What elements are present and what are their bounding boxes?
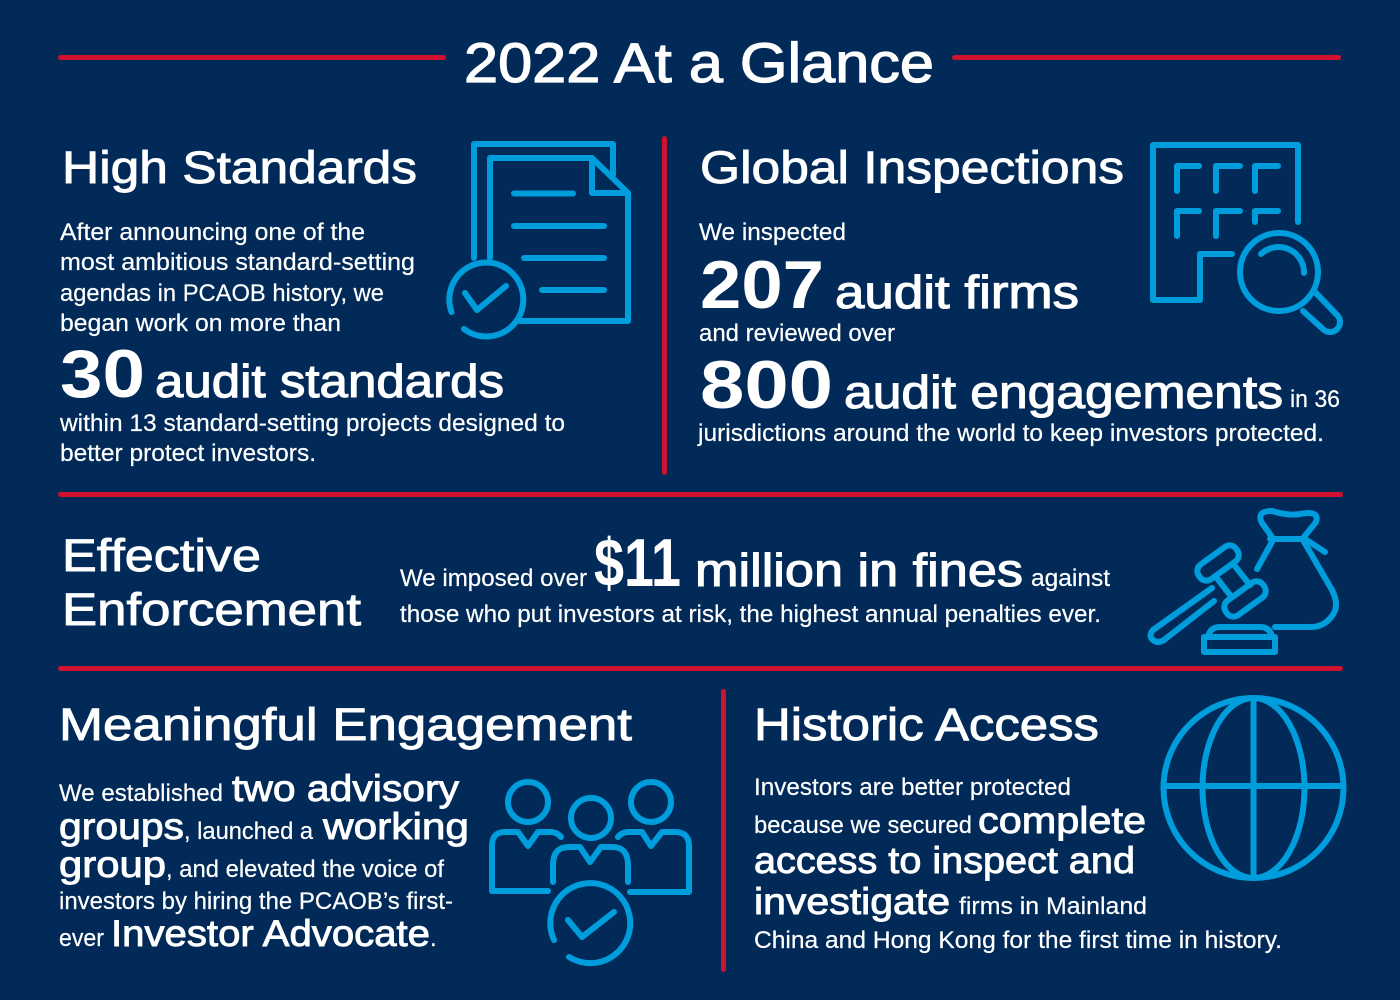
stat: 11 million in fines: [400, 525, 1110, 601]
heading: meaningful engagement: Meaningful Engagement: [59, 699, 633, 750]
text block: standards intro: most ambitious standard-setting: [60, 249, 415, 276]
text block: standards detail: better protect investors.: [60, 440, 316, 467]
text: enforcement detail: those who put investors at risk, the highest annual penalties ever.: [400, 601, 1101, 628]
stat: 11 million in fines: We imposed over: [400, 565, 587, 592]
text block: standards intro: [60, 219, 415, 337]
text block: engagement: ever: [59, 925, 104, 952]
stat: 800 audit engagements: [700, 347, 1340, 423]
stat: 207 audit firms: [700, 247, 1079, 323]
heading: high standards: High Standards: [62, 142, 417, 193]
icon: gavel and money bag: [1150, 511, 1336, 652]
text block: historic access: Investors are better protected: [754, 774, 1071, 801]
icon: document with check: [449, 144, 628, 336]
text block: historic access: access to inspect and: [754, 840, 1135, 881]
text block: engagement: , and elevated the voice of: [166, 856, 444, 883]
text block: engagement: investors by hiring the PCAOB’s first-: [59, 888, 453, 915]
stat: 30 audit standards: [60, 336, 504, 412]
stat: 800 audit engagements: audit engagements: [844, 366, 1283, 418]
stat: 207 audit firms: 207: [700, 247, 824, 323]
text block: standards detail: [59, 410, 565, 467]
text block: engagement: two advisory: [232, 768, 460, 809]
panel: global inspections: [697, 142, 1340, 447]
stat: 30 audit standards: 30: [60, 336, 145, 412]
text block: standards intro: began work on more than: [60, 310, 341, 337]
stat: 11 million in fines: million in fines: [695, 544, 1023, 596]
text block: historic access: investigate: [754, 881, 950, 922]
text block: engagement: [59, 768, 469, 954]
text block: historic access: China and Hong Kong for the first time in history.: [754, 927, 1282, 954]
text block: engagement: groups: [59, 806, 184, 847]
text block: engagement: .: [430, 925, 437, 952]
text: inspections detail: jurisdictions around the world to keep investors protected.: [697, 420, 1324, 447]
panel: high standards: [59, 142, 628, 467]
text block: standards intro: After announcing one of the: [60, 219, 365, 246]
heading: effective enforcement: Enforcement: [62, 584, 362, 635]
stat: 800 audit engagements: in 36: [1290, 386, 1340, 413]
text block: historic access: [754, 774, 1282, 954]
text: and reviewed over: and reviewed over: [699, 320, 895, 347]
text block: engagement: Investor Advocate: [111, 913, 430, 954]
panel: historic access: [754, 698, 1344, 954]
icon: people with check: [492, 782, 689, 963]
icon: building with magnifier: [1153, 145, 1340, 332]
icon: globe: [1164, 698, 1344, 878]
panel: effective enforcement: [62, 511, 1336, 652]
text block: engagement: , launched a: [184, 818, 314, 845]
title: 2022 At a Glance: [464, 31, 934, 94]
text block: historic access: complete: [978, 800, 1146, 841]
heading: global inspections: Global Inspections: [700, 142, 1124, 193]
text: we inspected: We inspected: [699, 219, 846, 246]
text block: engagement: working: [322, 806, 469, 847]
text block: engagement: We established: [59, 780, 223, 807]
panel: meaningful engagement: [59, 699, 689, 963]
text block: historic access: because we secured: [754, 812, 972, 839]
stat: 11 million in fines: $11: [594, 525, 681, 601]
text block: engagement: group: [59, 844, 166, 885]
heading: effective enforcement: [62, 530, 362, 635]
heading: historic access: Historic Access: [754, 699, 1099, 750]
stat: 30 audit standards: audit standards: [155, 355, 504, 407]
text block: historic access: firms in Mainland: [959, 893, 1147, 920]
text block: standards intro: agendas in PCAOB history, we: [60, 280, 384, 307]
heading: effective enforcement: Effective: [62, 530, 261, 581]
stat: 11 million in fines: against: [1031, 565, 1110, 592]
text block: standards detail: within 13 standard-setting projects designed to: [59, 410, 565, 437]
stat: 207 audit firms: audit firms: [835, 266, 1079, 318]
stat: 800 audit engagements: 800: [700, 347, 833, 423]
